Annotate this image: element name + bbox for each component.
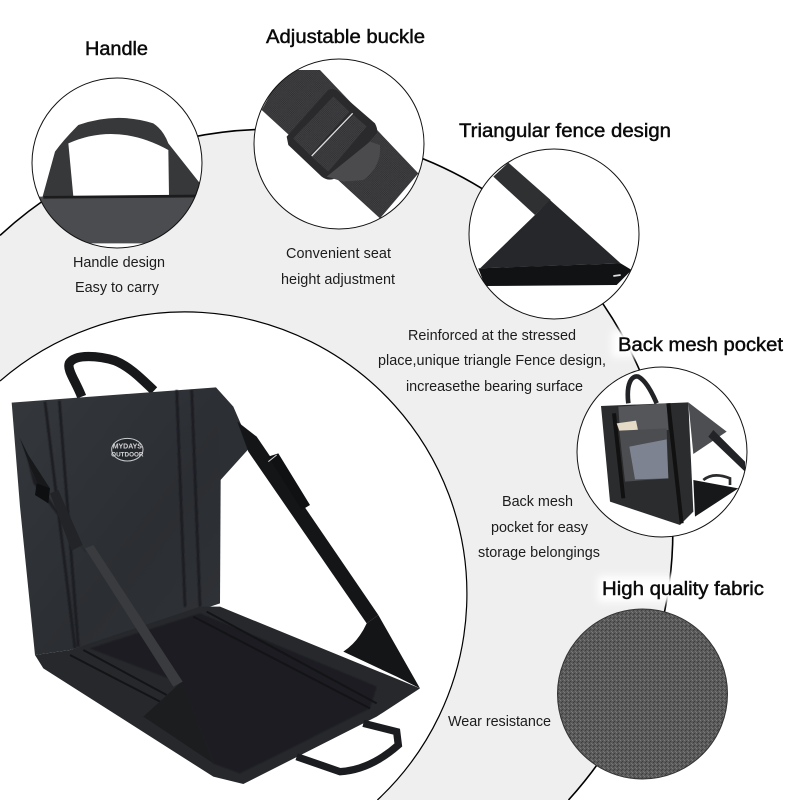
text: back mesh description <box>478 494 600 561</box>
text: triangular fence description <box>378 328 606 395</box>
text: buckle description <box>281 246 395 288</box>
circle: buckle <box>254 59 424 229</box>
logo: MYDAYS <box>113 443 142 450</box>
text: triangular fence description: place,unique triangle Fence design, <box>378 353 606 369</box>
text: buckle description: height adjustment <box>281 272 395 288</box>
heading: back mesh pocket: Back mesh pocket <box>618 335 784 356</box>
logo: OUTDOOR <box>111 451 144 458</box>
panel: main chair photo <box>0 312 467 800</box>
text: back mesh description: pocket for easy <box>491 520 589 536</box>
text: handle description: Easy to carry <box>75 280 160 296</box>
text: back mesh description: storage belongings <box>478 545 600 561</box>
text: fabric description: Wear resistance <box>448 714 551 730</box>
heading: high quality fabric: High quality fabric <box>602 579 764 600</box>
pocket contents <box>617 421 668 482</box>
text: buckle description: Convenient seat <box>286 246 391 262</box>
circle: high quality fabric <box>558 609 728 779</box>
logo <box>111 438 144 461</box>
heading: adjustable buckle: Adjustable buckle <box>266 27 425 48</box>
text: handle description: Handle design <box>73 255 165 271</box>
circle: back mesh pocket <box>577 367 747 537</box>
background gray circle <box>0 129 673 800</box>
text: back mesh description: Back mesh <box>502 494 573 510</box>
circle: handle <box>32 78 203 248</box>
heading: handle: Handle <box>85 39 148 60</box>
circle: triangular fence <box>469 149 639 319</box>
text: triangular fence description: increasethe bearing surface <box>406 379 583 395</box>
text: triangular fence description: Reinforced at the stressed <box>408 328 576 344</box>
heading: triangular fence design: Triangular fence design <box>459 121 671 142</box>
chair illustration <box>12 356 420 784</box>
text: handle description <box>73 255 165 296</box>
